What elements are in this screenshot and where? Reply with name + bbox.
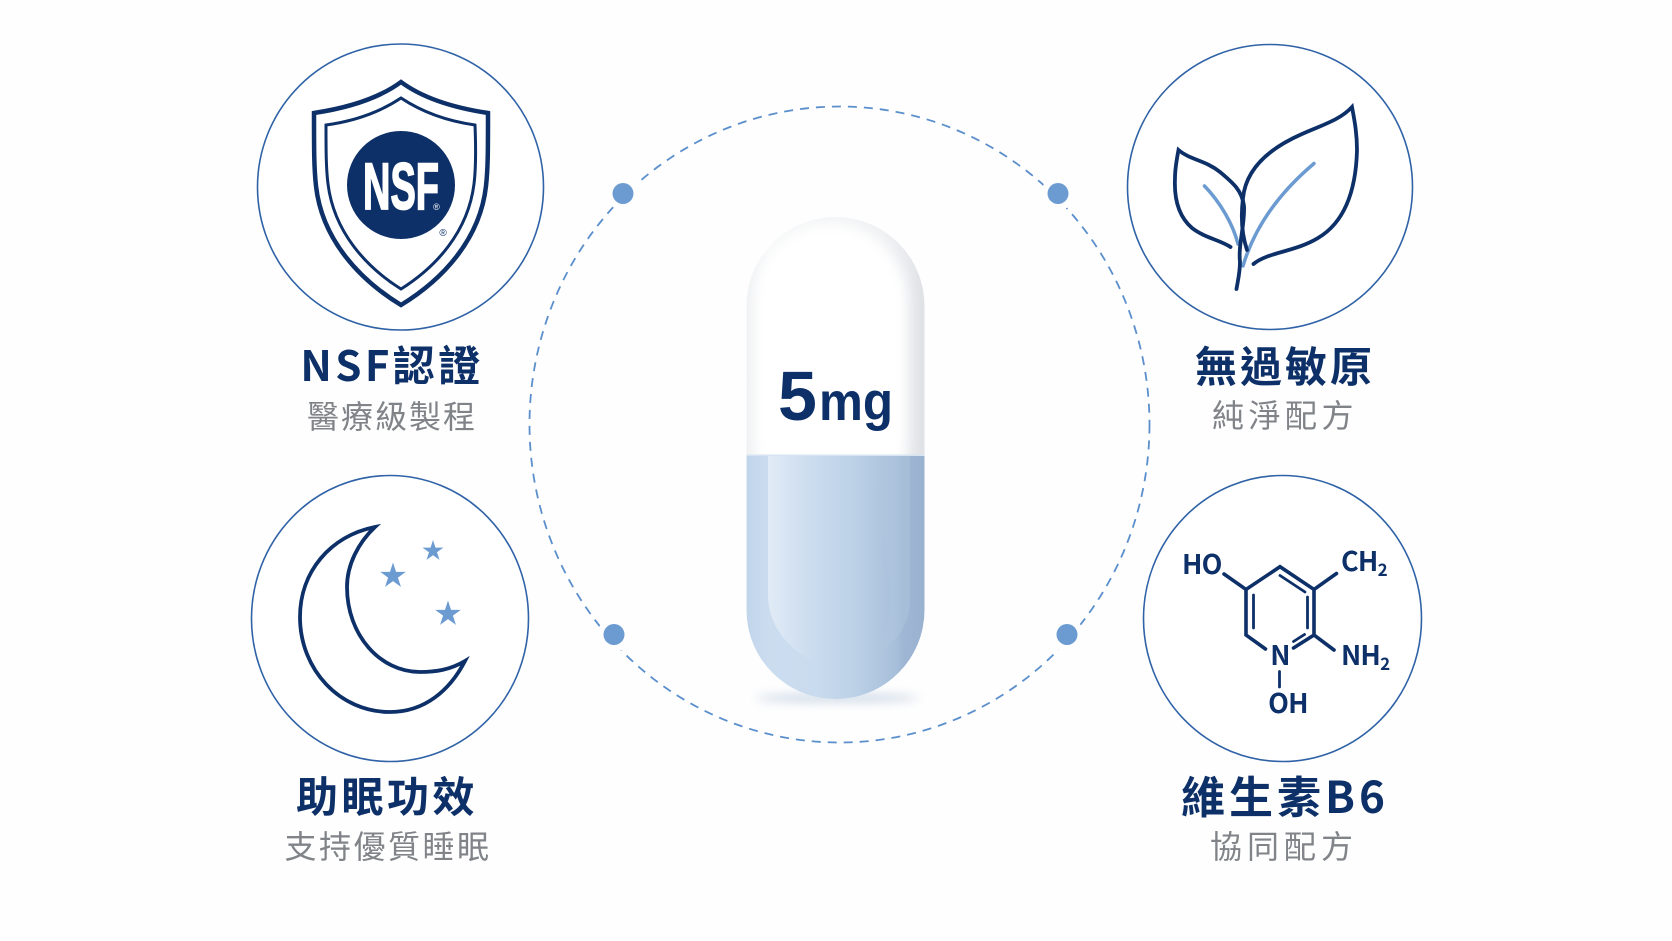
- subheading: NSF: 醫療級製程: [307, 392, 477, 438]
- icon: B6 molecule: CH: [1341, 540, 1378, 579]
- dashed orbit around capsule: [530, 106, 1150, 742]
- capsule dose label: 5: [778, 357, 817, 435]
- icon: B6 molecule: HO: [1182, 543, 1222, 582]
- capsule dose label: [778, 357, 893, 435]
- capsule: [746, 217, 924, 699]
- heading: vitamin B6: 維生素B6: [1181, 762, 1389, 826]
- feature: no allergens: [1128, 44, 1412, 437]
- feature: sleep aid: [252, 476, 528, 868]
- feature: NSF certification: [258, 44, 544, 438]
- subheading: vitamin B6: 協同配方: [1210, 822, 1358, 868]
- icon: NSF shield: ®: [439, 228, 447, 239]
- capsule dose label: mg: [819, 372, 893, 432]
- subheading: sleep aid: 支持優質睡眠: [284, 822, 492, 868]
- icon: B6 molecule: 2: [1380, 650, 1390, 675]
- heading: no allergens: 無過敏原: [1195, 334, 1375, 395]
- ring: NSF: [258, 44, 544, 330]
- icon: B6 molecule: NH: [1341, 634, 1380, 673]
- ring: molecule: [1144, 476, 1422, 762]
- icon: moon and stars: [300, 527, 465, 712]
- icon: NSF shield: [314, 82, 488, 305]
- heading: NSF: NSF認證: [300, 333, 484, 394]
- orbit dot: top left: [612, 183, 634, 204]
- feature: vitamin B6: [1144, 476, 1422, 868]
- icon: NSF shield: NSF: [363, 149, 439, 223]
- icon: leaf: [1175, 107, 1357, 289]
- icon: B6 molecule: [1182, 540, 1390, 721]
- orbit dot: bottom left: [604, 624, 624, 645]
- heading: sleep aid: 助眠功效: [296, 764, 478, 825]
- ring: leaf: [1128, 44, 1412, 330]
- subheading: no allergens: 純淨配方: [1212, 391, 1358, 437]
- capsule shadow: [755, 694, 919, 702]
- icon: NSF shield: ®: [433, 202, 440, 212]
- icon: B6 molecule: N: [1270, 634, 1290, 673]
- ring: moon: [252, 476, 528, 762]
- icon: B6 molecule: 2: [1378, 556, 1388, 581]
- orbit dot: bottom right: [1056, 624, 1078, 645]
- icon: B6 molecule: OH: [1268, 682, 1308, 721]
- orbit dot: top right: [1048, 183, 1068, 204]
